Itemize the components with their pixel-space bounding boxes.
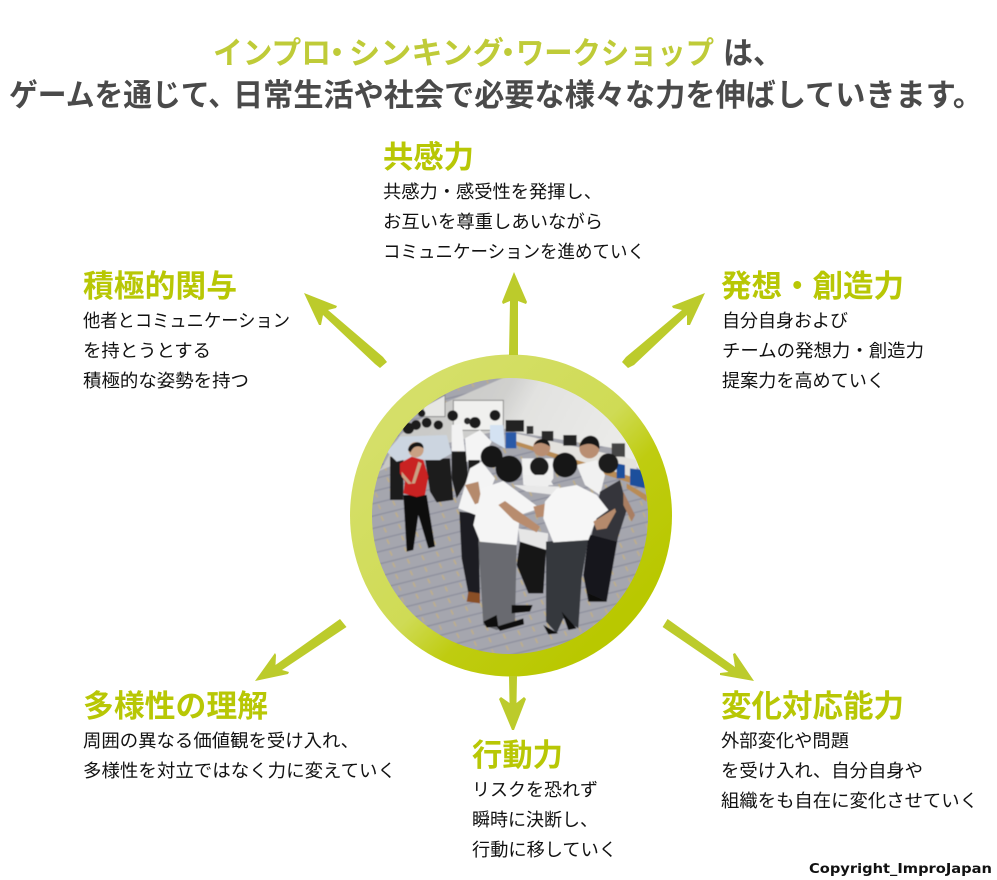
title line 1: workshop name	[213, 36, 714, 71]
body text	[722, 311, 924, 391]
heading: 行動力	[472, 738, 563, 773]
arrow: down	[499, 676, 526, 730]
body text: お互いを尊重しあいながら	[383, 212, 603, 232]
panel: active engagement	[83, 269, 290, 391]
title line 1: workshop name: ・	[493, 36, 523, 71]
center-right man	[546, 538, 588, 633]
body text: 外部変化や問題	[721, 731, 849, 751]
title line 2: 日常生活や社会で必要な様々な力を伸ばしていきます。	[233, 78, 983, 113]
central ring with photo	[350, 354, 672, 676]
back people	[517, 542, 547, 593]
title line 2: ゲームを通じて、	[9, 78, 237, 113]
left man	[459, 512, 480, 595]
heading: 共感力	[383, 140, 474, 175]
title line 1: workshop name: シンキング	[349, 36, 504, 71]
body text: 共感力・感受性を発揮し、	[383, 182, 602, 202]
heading: 積極的関与	[83, 269, 237, 304]
title line 1: workshop name: ・	[322, 36, 352, 71]
arrow: upper left	[304, 293, 387, 368]
body text: 行動に移していく	[472, 840, 617, 860]
body text: コミュニケーションを進めていく	[383, 242, 645, 262]
ring	[350, 354, 672, 676]
title	[9, 36, 983, 113]
body text: 他者とコミュニケーション	[83, 311, 290, 331]
body text: を受け入れ、自分自身や	[721, 761, 923, 781]
photo	[370, 375, 650, 658]
body text: 組織をも自在に変化させていく	[721, 791, 978, 811]
panel: ideation and creativity	[721, 269, 924, 391]
title line 1: workshop name: インプロ	[213, 36, 331, 71]
background group	[390, 457, 403, 500]
body text: 周囲の異なる価値観を受け入れ、	[83, 731, 359, 751]
arrow: lower left	[255, 619, 346, 681]
arrow: up	[502, 272, 527, 355]
arrow: upper right	[622, 293, 705, 368]
woman in red	[403, 495, 435, 552]
body text	[83, 311, 290, 391]
body text: 多様性を対立ではなく力に変えていく	[83, 761, 396, 781]
title line 1 suffix: は、	[723, 36, 783, 71]
heading: 発想・創造力	[721, 269, 904, 304]
body text	[383, 182, 645, 262]
heading: 変化対応能力	[721, 689, 904, 724]
body text: リスクを恐れず	[472, 780, 598, 800]
panel: action	[472, 738, 617, 860]
body text	[721, 731, 978, 811]
body text: を持とうとする	[83, 341, 211, 361]
body text	[472, 780, 617, 860]
copyright: Copyright_ImproJapan	[809, 861, 992, 877]
panel: empathy	[383, 140, 645, 262]
title line 1: workshop name: ワークショップ	[516, 36, 714, 71]
body text: 積極的な姿勢を持つ	[83, 371, 249, 391]
arrow: lower right	[663, 619, 754, 681]
body text: 提案力を高めていく	[722, 371, 885, 391]
body text: 自分自身および	[722, 311, 848, 331]
room	[380, 378, 640, 471]
center-left man	[478, 542, 517, 630]
body text	[83, 731, 396, 781]
panel: understanding diversity	[83, 689, 396, 781]
body text: 瞬時に決断し、	[472, 810, 598, 830]
panel: adaptability	[721, 689, 978, 811]
heading: 多様性の理解	[83, 689, 268, 724]
body text: チームの発想力・創造力	[722, 341, 924, 361]
